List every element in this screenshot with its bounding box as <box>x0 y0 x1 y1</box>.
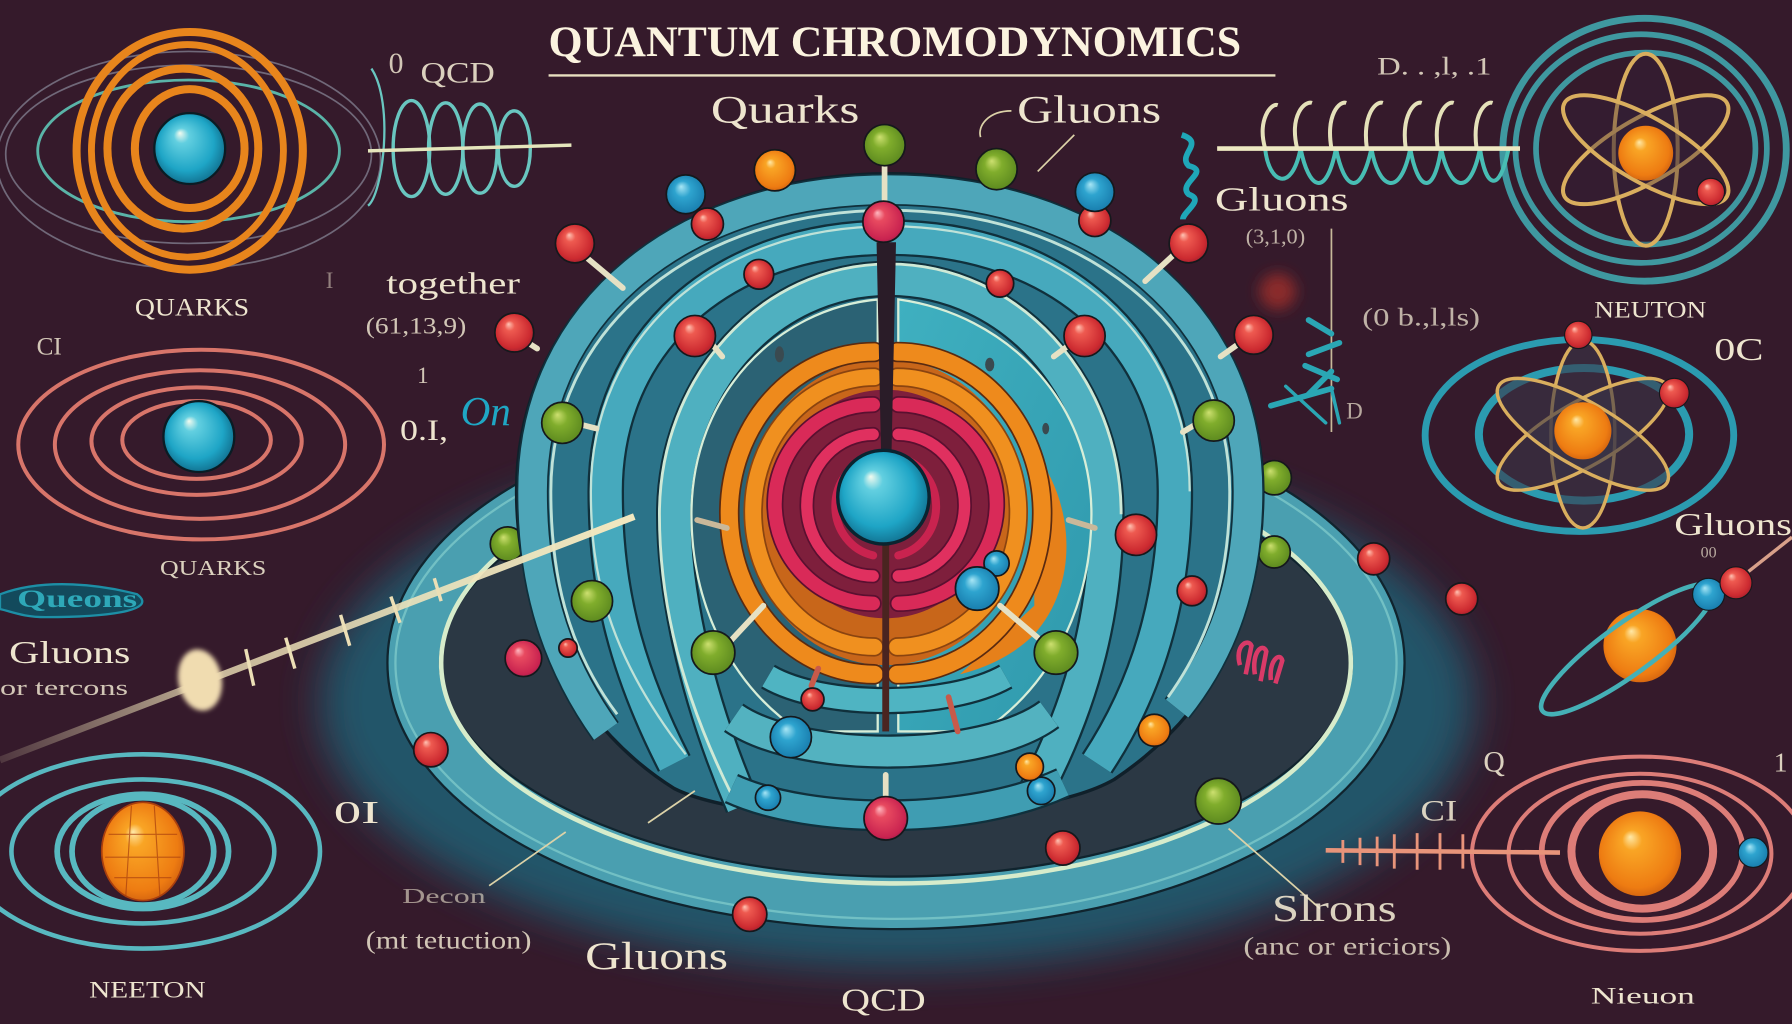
labels: NEETON <box>89 978 206 1003</box>
beam: bottom right <box>1326 833 1560 870</box>
outer band <box>533 190 1248 731</box>
atom: middle left quarks <box>18 350 384 539</box>
green gluons <box>542 125 1241 824</box>
labels: CI <box>37 333 62 360</box>
labels: (0 b.,l,ls) <box>1362 305 1480 332</box>
labels: Slrons <box>1272 888 1397 930</box>
inner panel right <box>898 299 1091 731</box>
labels: or tercons <box>0 676 128 700</box>
panel rivets <box>775 346 1049 434</box>
teal squiggle letters: On <box>461 388 511 434</box>
labels: D <box>1346 398 1363 423</box>
labels: Quarks <box>711 88 859 131</box>
labels: Q <box>1483 746 1505 778</box>
labels: NEUTON <box>1594 298 1706 323</box>
labels: 0 <box>389 48 403 80</box>
icon: central nucleus ball <box>838 450 929 544</box>
labels: Nieuon <box>1591 983 1696 1008</box>
atom: bottom left neutron <box>0 754 320 949</box>
orange crescent <box>960 451 1066 674</box>
labels: 1 <box>417 363 429 388</box>
lower shelf bands <box>731 677 1063 815</box>
atom: top left quarks <box>0 32 381 270</box>
labels: CI <box>1421 796 1457 828</box>
crimson quarks <box>505 201 907 840</box>
teal gluons swoosh label: Queons <box>17 586 137 613</box>
labels: Gluons <box>1674 506 1792 542</box>
pink arcs <box>775 405 997 603</box>
teal gluons swoosh label <box>0 584 142 617</box>
labels: 0I <box>334 794 379 830</box>
labels: QUARKS <box>135 294 249 321</box>
atom: top right neutron <box>1503 18 1786 281</box>
labels: 0.I, <box>400 415 448 447</box>
labels: (3,1,0) <box>1246 226 1305 248</box>
labels: Gluons <box>1215 180 1349 218</box>
core fill behind the arcs <box>746 359 1025 665</box>
inner panel left <box>691 299 878 731</box>
labels: (anc or ericiors) <box>1243 933 1451 960</box>
blue and orange quarks <box>666 150 1170 810</box>
atom: bottom right neutron <box>1472 757 1792 951</box>
central slit <box>877 242 896 731</box>
labels: Gluons <box>9 634 130 670</box>
labels: D. . ,l, .1 <box>1377 53 1491 80</box>
labels: 1 <box>1774 747 1787 777</box>
outer orange arcs <box>729 352 1042 674</box>
coil: top left gluon spring <box>368 69 571 206</box>
labels: QCD <box>841 981 926 1017</box>
orbital ring around dome <box>395 407 1397 919</box>
atom: saturn-like nucleus <box>1528 537 1792 731</box>
middle band <box>591 226 1190 763</box>
labels: (61,13,9) <box>366 314 466 339</box>
leader lines <box>489 111 1320 909</box>
labels: Gluons <box>1017 88 1161 131</box>
dome shell <box>517 174 1263 818</box>
labels: I <box>326 268 333 293</box>
labels: together <box>386 267 520 301</box>
beam arrow from the left <box>0 517 634 760</box>
ground glow under dome <box>320 438 1474 968</box>
orbit ball connectors <box>528 165 1240 795</box>
coil: top right gluon spring <box>1182 103 1520 219</box>
beam ticks <box>246 578 441 686</box>
labels: 0C <box>1714 331 1763 367</box>
title: QUANTUM CHROMODYNOMICS <box>549 18 1241 66</box>
labels: 00 <box>1701 545 1717 562</box>
red quarks <box>414 205 1478 931</box>
dome silhouette <box>517 174 1263 818</box>
labels: (mt tetuction) <box>366 928 531 955</box>
gluons behind the dome <box>490 461 1291 568</box>
vertical gluon squiggle <box>1259 229 1339 432</box>
small pink coil <box>1239 643 1282 683</box>
concentric orange and pink core <box>729 352 1066 674</box>
labels: QUARKS <box>160 558 266 580</box>
inner band <box>659 264 1121 806</box>
atom: middle right <box>1425 321 1734 531</box>
labels: Decon <box>402 886 486 908</box>
labels: Gluons <box>585 935 728 978</box>
labels: QCD <box>421 57 495 89</box>
